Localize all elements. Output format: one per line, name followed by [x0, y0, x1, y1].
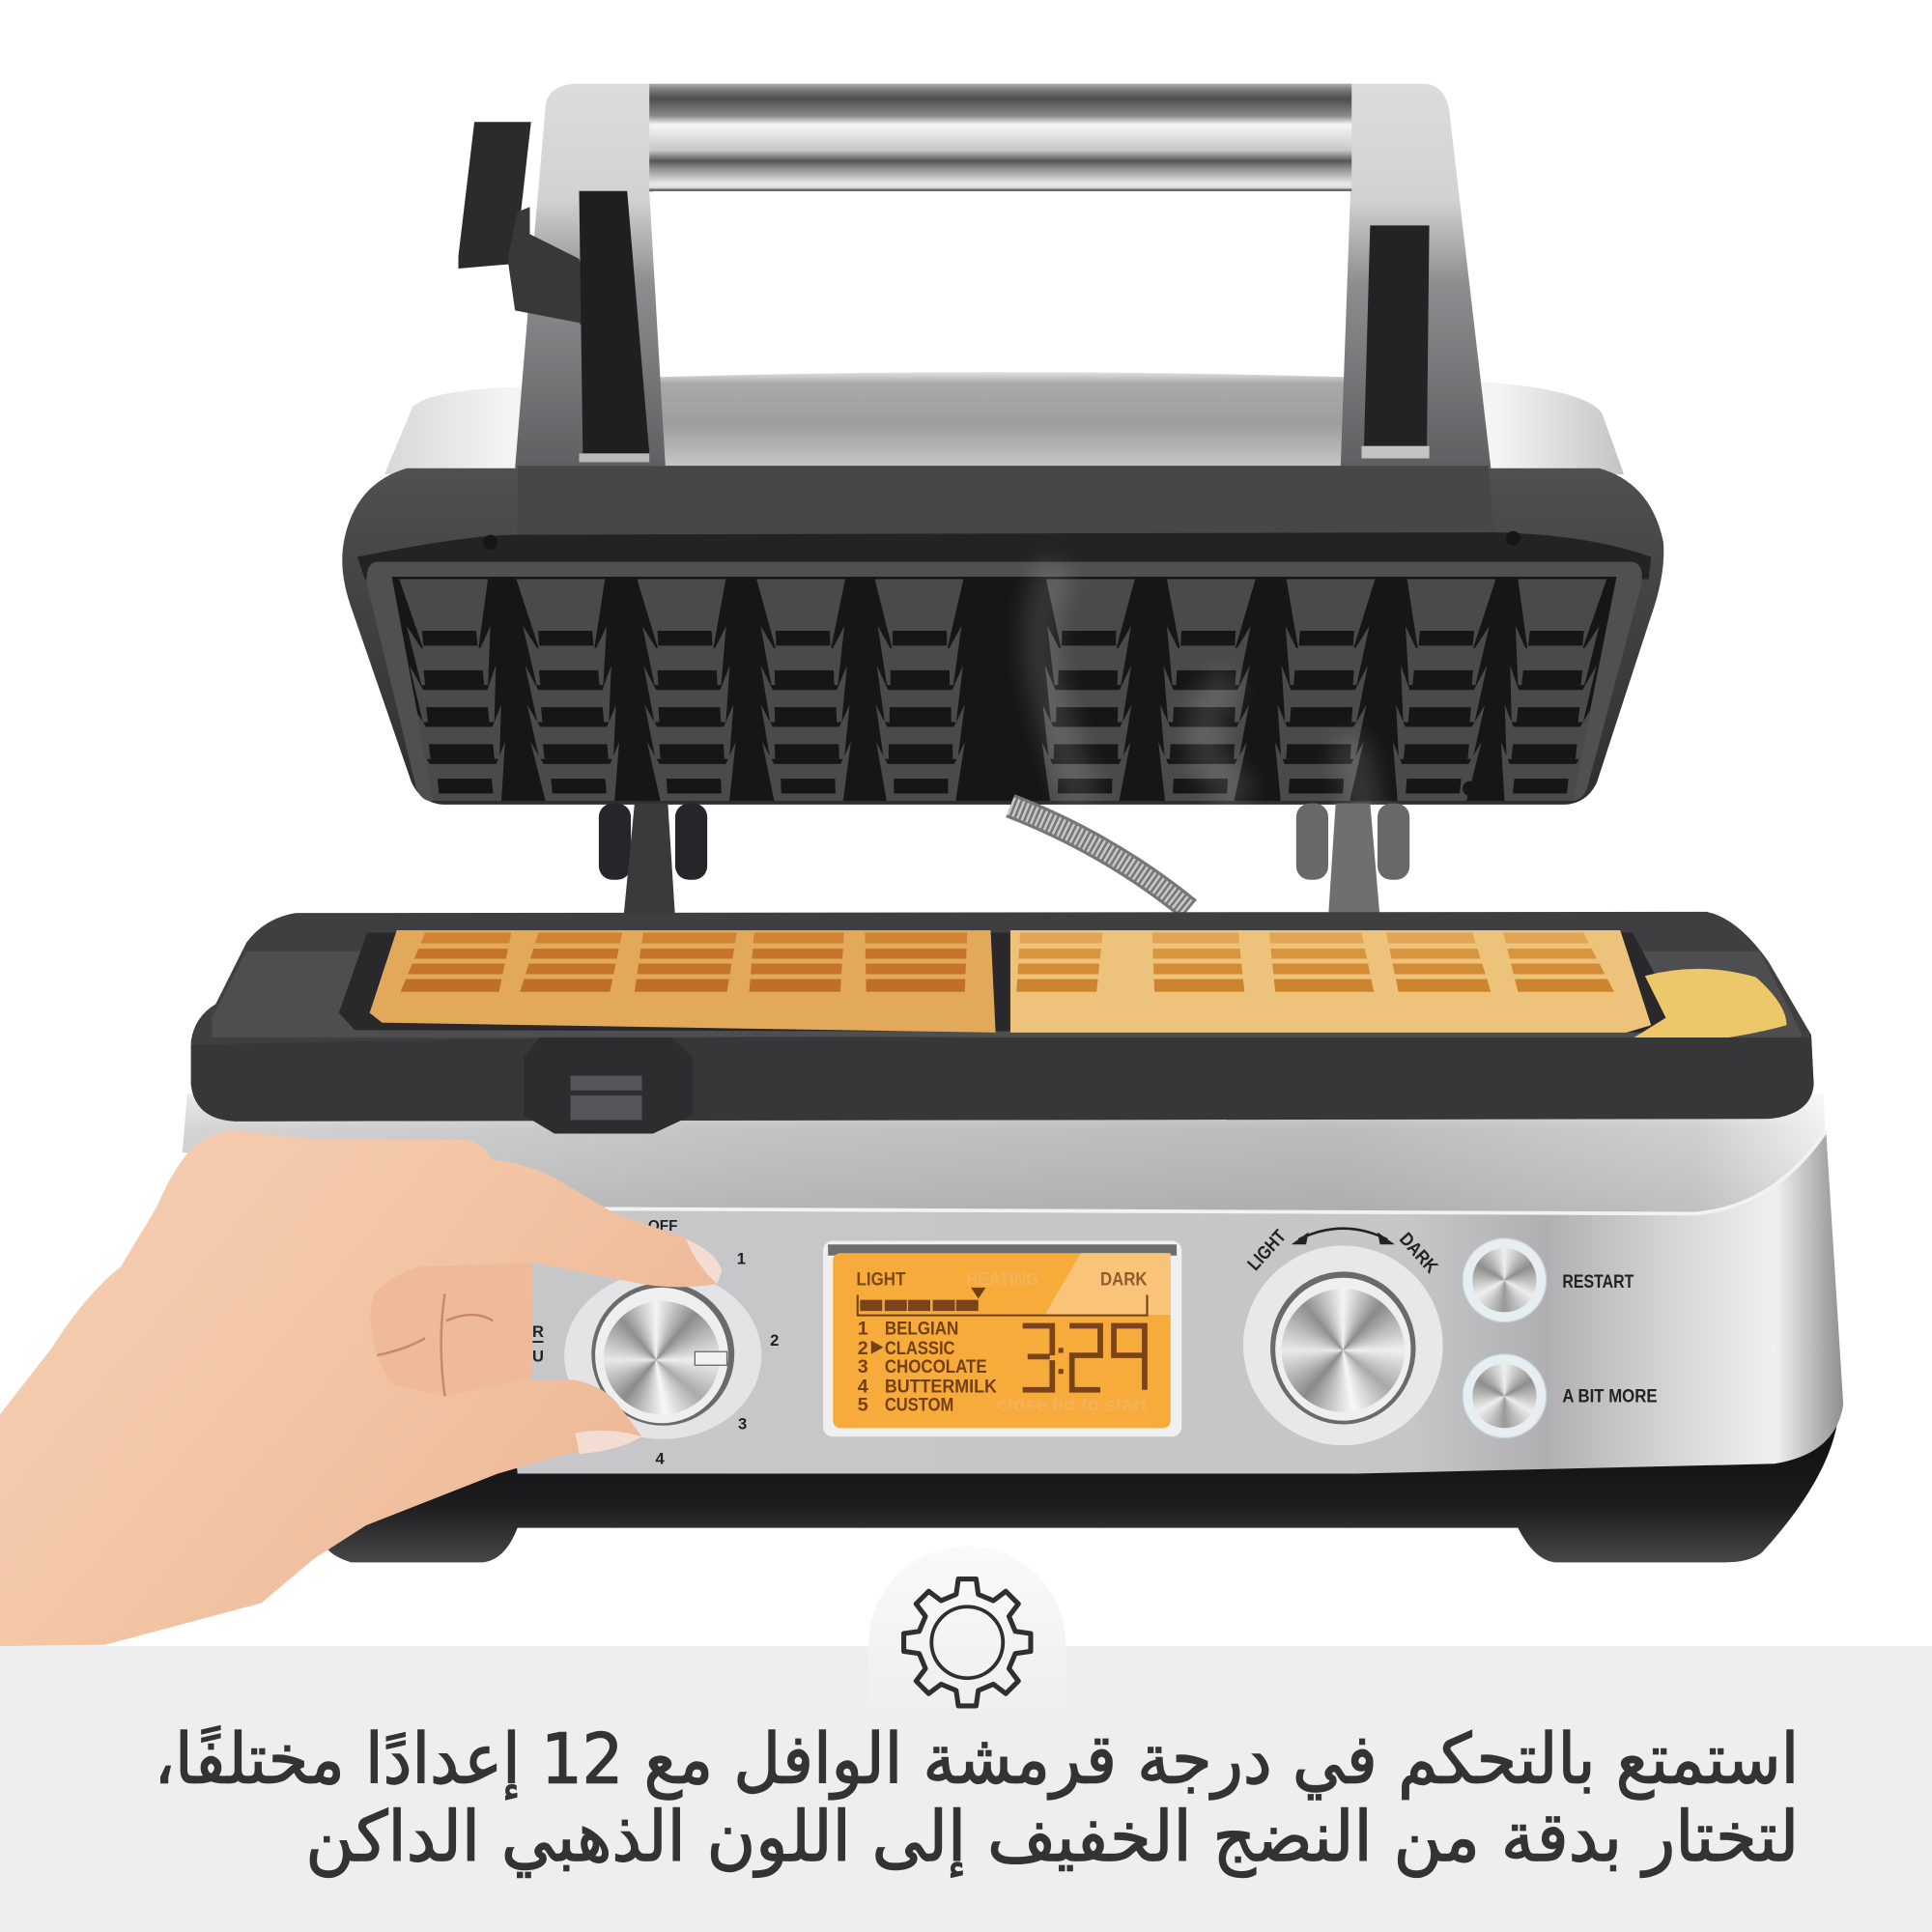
- menu list: 1: [858, 1318, 868, 1339]
- icon badge: [868, 1547, 1065, 1719]
- handle left arm: [515, 84, 666, 469]
- steam: [1040, 567, 1363, 906]
- left knob numbers: U: [532, 1347, 544, 1365]
- right slot: [1361, 225, 1430, 458]
- batter: [1614, 969, 1786, 1050]
- menu list: CLASSIC: [885, 1338, 955, 1359]
- LCD display: LIGHT: [856, 1269, 906, 1290]
- left knob numbers: OFF: [648, 1218, 678, 1235]
- caption text: لتختار بدقة من النضج الخفيف إلى اللون الذهبي الداكن: [305, 1797, 1799, 1878]
- light dark arc: [1244, 1226, 1441, 1278]
- hand: [0, 1130, 722, 1646]
- left knob numbers: 1: [737, 1250, 746, 1268]
- hinges and cable: [599, 804, 1409, 918]
- upper band light overlay: [183, 1094, 1829, 1213]
- lid waffle plate well: [367, 562, 1642, 801]
- lid inner dark grid: [392, 577, 1616, 801]
- light dark arc: LIGHT: [1244, 1226, 1291, 1275]
- front rim: [191, 1037, 1814, 1122]
- left knob numbers: 2: [770, 1331, 779, 1350]
- menu list: 2: [858, 1338, 868, 1359]
- menu list: CHOCOLATE: [885, 1356, 987, 1378]
- panel top highlight: [579, 1131, 1826, 1213]
- menu list: CUSTOM: [885, 1394, 953, 1415]
- bottom caption panel: [0, 1646, 1932, 1932]
- restart button: [1463, 1238, 1634, 1322]
- handle bar: [649, 84, 1351, 191]
- left knob: [564, 1271, 761, 1439]
- nails: [686, 1239, 722, 1284]
- menu list: [858, 1318, 998, 1415]
- lid back brushed plate: [659, 372, 1346, 469]
- right hinge: [1296, 804, 1409, 918]
- lid screws: [483, 531, 1520, 550]
- front panel: [493, 1131, 1843, 1474]
- restart button: RESTART: [1562, 1271, 1634, 1293]
- left knob numbers: [532, 1218, 779, 1467]
- grey shelf: [212, 952, 1802, 1037]
- menu list: 5: [858, 1394, 868, 1415]
- a bit more button: [1463, 1354, 1658, 1438]
- handle right arm: [1341, 84, 1491, 469]
- left knob numbers: 3: [738, 1415, 747, 1434]
- right knob: [1243, 1246, 1443, 1445]
- lid centre bracket: [518, 466, 1493, 535]
- timer digits 3:29: 3:29: [1020, 1391, 1023, 1393]
- left knob numbers: 4: [656, 1449, 666, 1467]
- left latch: [458, 122, 649, 462]
- caption text: استمتع بالتحكم في درجة قرمشة الوافل مع 12 إعدادًا مختلفًا،: [154, 1719, 1799, 1801]
- menu list: 4: [858, 1376, 868, 1397]
- waffle maker lower plate: [191, 912, 1814, 1133]
- left knob numbers: R: [532, 1322, 544, 1341]
- LCD display: close lid to start: [997, 1395, 1148, 1415]
- menu list: BUTTERMILK: [885, 1376, 998, 1397]
- plate recess: [339, 933, 1678, 1033]
- dark base: [323, 1417, 1838, 1562]
- LCD bezel: [823, 1240, 1181, 1436]
- browning bar: [858, 1288, 1148, 1316]
- timer digits 3:29: [1020, 1325, 1145, 1393]
- menu list: 3: [858, 1356, 868, 1378]
- caption text: [154, 1719, 1799, 1878]
- right waffle: [1010, 930, 1651, 1033]
- waffle maker upper lid: [342, 83, 1663, 805]
- lid plate outer rim: [342, 469, 1663, 805]
- lid back shell: [384, 382, 1624, 474]
- finger crease: [377, 1293, 493, 1396]
- curled fingers: [357, 1257, 533, 1407]
- lid inner band: [357, 532, 1651, 579]
- hand and thumb: [0, 1130, 722, 1646]
- light dark arc: DARK: [1395, 1229, 1441, 1278]
- upper silver band: [183, 1094, 1829, 1213]
- left hinge: [599, 804, 707, 918]
- LCD display: DARK: [1100, 1269, 1148, 1290]
- LCD display: HEATING: [966, 1269, 1038, 1290]
- a bit more button: A BIT MORE: [1562, 1386, 1658, 1407]
- lower screws: [525, 781, 1477, 800]
- waffle plate teeth: [399, 579, 1606, 801]
- LCD display: [828, 1244, 1177, 1428]
- menu list: BELGIAN: [885, 1318, 958, 1339]
- waffle maker body: [183, 1094, 1843, 1562]
- left waffle: [370, 930, 996, 1033]
- power cable: [1010, 806, 1189, 909]
- icon: gear: [904, 1579, 1031, 1706]
- front latch: [524, 1037, 693, 1133]
- lower plate surface: [191, 912, 1814, 1122]
